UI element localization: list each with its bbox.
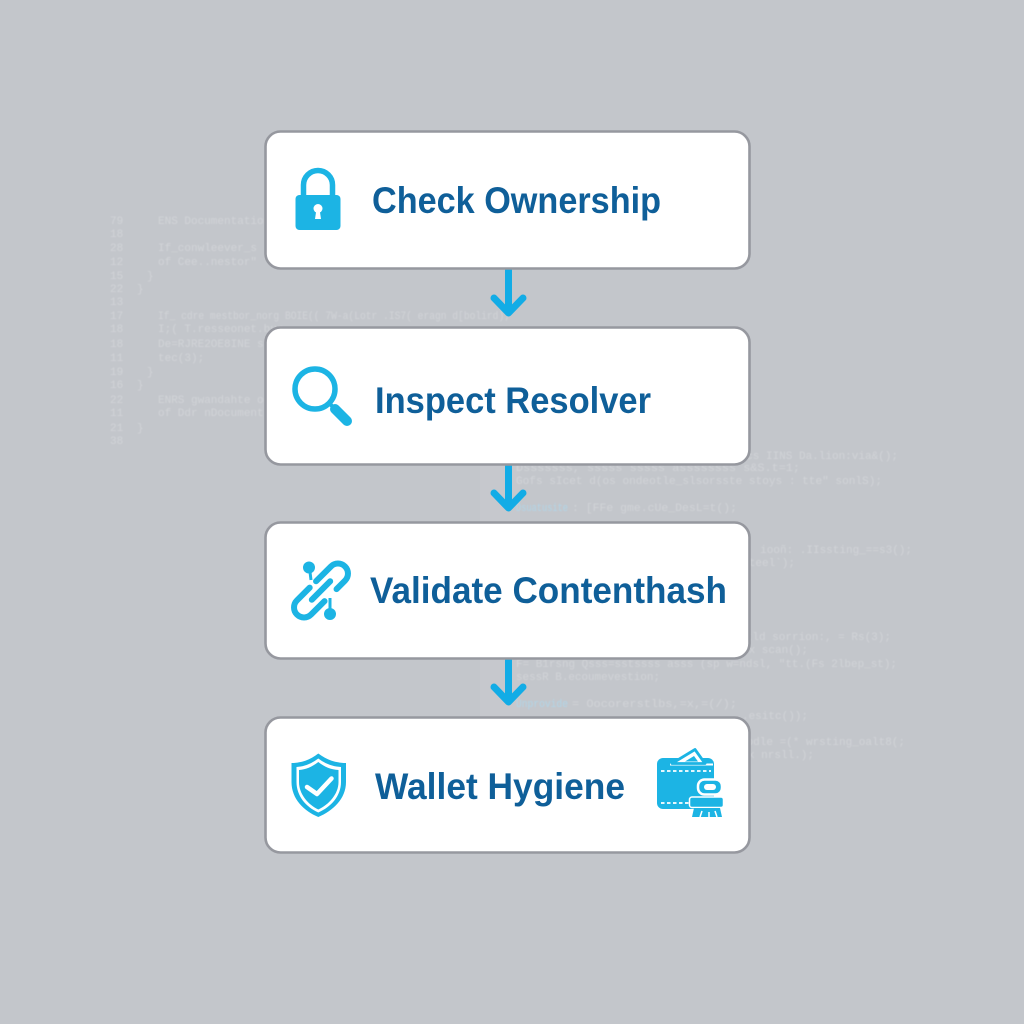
background code: right block: iooñ: .IIssting_==s3(); [760,545,912,557]
panel: inspect resolver [266,328,750,464]
background code: right block: Dsuatusite [516,503,568,515]
panel: validate contenthash [266,522,750,658]
background code: right block [516,451,912,762]
heading: wallet hygiene: Wallet Hygiene [375,766,625,807]
background code: right block: Unprovide [516,699,568,711]
arrow: ownership to resolver [494,270,523,313]
icon: wallet with brush [657,750,724,817]
background code: right block: F= B1rsng Qsss=sstssss asss (sp w=ndsl, "tt.(Fs 2lbep_st); [516,659,897,671]
background code: left block: 22 [110,284,123,296]
background code: left block: 11 [110,408,124,420]
background code: left block: of Ddr nDocument [158,408,264,420]
background code: left block: } [137,284,144,296]
background code: left block: 18 [110,339,123,351]
code panel strip: upper gap [480,465,520,522]
background code: left block: ENRS gwandahte oo [158,395,270,407]
background code: right block: sessR B.ecoumevestion; [516,672,660,684]
background code: left block: De=RJRE2OE8INE s [158,339,264,351]
background code: right block: x scan(); [749,645,808,657]
background code: right block: Rodle =(* wrsting_oalt8(; [740,737,905,749]
background code: left block: 13 [110,297,123,309]
background code: left block: 17 [110,311,123,323]
background code: left block: tec(3); [158,353,204,365]
background code: right block: Gofs sIcet d(os ondeotle_slsorsste stoys : tte" sonlS); [516,476,882,488]
arrow: contenthash to wallet hygiene [494,660,523,702]
background code: left block: } [147,367,154,379]
background code: left block: } [147,271,154,283]
heading: validate contenthash: Validate Contenthash [370,570,727,611]
icon: shield with check [292,754,346,817]
heading: check ownership: Check Ownership [372,180,661,221]
background code: left block: 18 [110,324,123,336]
background code: left block: 12 [110,257,123,269]
background code: right block: teel`); [749,557,795,570]
background code: left block: 21 [110,423,124,435]
panel: wallet hygiene [266,718,750,852]
background code: left block: } [137,380,144,392]
background code: left block: 15 [110,271,123,283]
background code: left block: 18 [110,229,123,241]
arrow: resolver to contenthash [494,466,523,508]
icon: padlock [296,170,340,230]
background code: left block: 19 [110,367,123,379]
background code: left block: 16 [110,380,123,392]
icon: magnifying glass [295,369,347,421]
background code: left block: 28 [110,243,123,255]
background code: left block: If_ cdre mestbor_norg BOIE(( 7W-a(Lotr .IS7( eragn d[bolird); [158,311,510,323]
background code: left block: 11 [110,353,124,365]
background code: left block: If_conwleever_s [158,243,257,255]
heading: inspect resolver: Inspect Resolver [375,380,651,421]
background code: left block: of Cee..nestor" [158,257,257,269]
icon: chain link with nodes [290,559,352,622]
background code: left block: 38 [110,436,123,448]
panel: check ownership [266,132,750,268]
background code: left block: 22 [110,395,123,407]
code panel strip: lower gap [480,659,520,717]
background code: right block: ottld sorrion:, = Rs(3); [733,632,891,644]
background code: right block: x nrsll.); [748,750,814,762]
background code: left block: I;( T.resseonet.bur [158,324,283,336]
background code: right block: Dsssssss, sssss sssss assssssss s&S.t=1; [516,463,800,475]
background code: left block: ENS Documentation [158,216,270,228]
background code: left block: 79 [110,216,123,228]
background code: right block: : [FFe gme.cUe_DesL=t(); [572,503,737,515]
background code: left block [110,216,510,448]
background code: right block: ...esitc()); [729,711,808,723]
background code: left block: } [137,423,144,435]
background code: right block: = Oocorerstlbs,=x,=(/); [572,699,737,711]
background code: right block: acs IINS Da.lion:via&(); [740,451,898,463]
